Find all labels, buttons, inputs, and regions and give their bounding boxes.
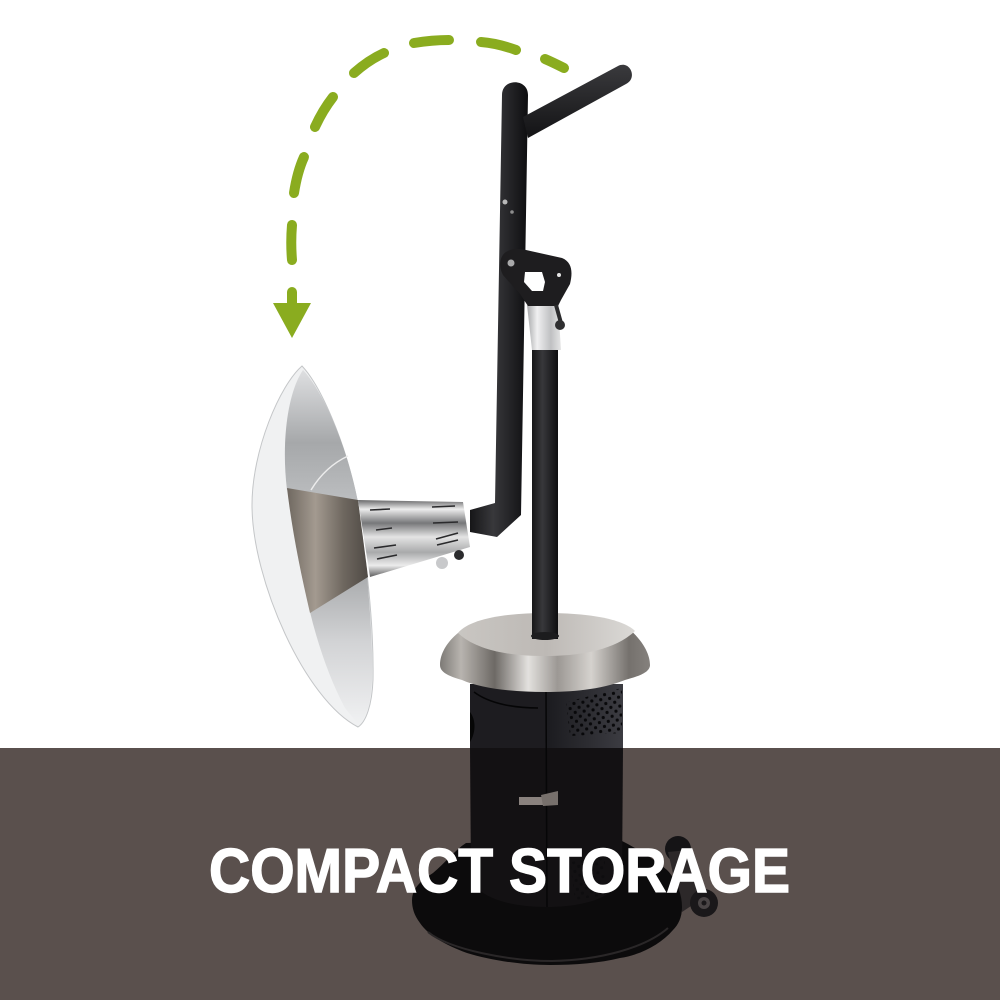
lever knob	[555, 320, 565, 330]
angled hook branch	[523, 65, 632, 138]
arm bolts	[502, 200, 514, 214]
side handle cut-out	[470, 712, 474, 742]
lever	[556, 305, 561, 323]
dish upper silver	[285, 370, 358, 502]
base plate	[412, 840, 682, 965]
top plate	[458, 613, 635, 656]
icon: wheel bracket	[668, 850, 706, 912]
central pole	[532, 348, 558, 639]
dish outer white rim	[252, 366, 373, 727]
silver sleeve	[527, 303, 561, 350]
cylinder below band	[470, 748, 623, 907]
dome skirt	[440, 628, 650, 692]
pole collar	[531, 632, 559, 640]
dish upper seam	[311, 456, 348, 490]
dish lower silver	[310, 575, 372, 724]
door seam	[546, 692, 547, 907]
icon: upper wheel	[665, 836, 691, 862]
cylinder tank housing	[470, 684, 623, 907]
icon: lower wheel	[690, 889, 718, 917]
reflector dish	[252, 366, 470, 727]
bracket bolt	[508, 260, 514, 266]
arrow head	[273, 292, 311, 338]
dashed green arrow	[273, 40, 564, 338]
burner knob silver	[436, 557, 448, 569]
base rim highlight	[428, 928, 668, 961]
bracket rivet	[557, 273, 561, 277]
vent holes	[566, 688, 622, 736]
lower vent holes	[570, 858, 605, 900]
bracket cut-out	[524, 272, 545, 291]
burner slots	[370, 506, 458, 559]
latch	[519, 791, 558, 806]
pivot bracket	[500, 200, 571, 330]
left panel above band	[470, 684, 546, 748]
base with wheels	[412, 836, 718, 965]
burner housing	[358, 500, 470, 577]
mesh cone	[287, 488, 368, 613]
patio heater product	[252, 65, 718, 965]
caption: compact storage: COMPACT STORAGE	[209, 837, 790, 906]
dome top cover	[440, 613, 650, 692]
bottom caption band	[0, 748, 1000, 1000]
left door slot	[474, 692, 538, 708]
burner knob dark	[454, 550, 464, 560]
right panel above band	[546, 684, 623, 748]
bent support arm	[470, 82, 528, 537]
